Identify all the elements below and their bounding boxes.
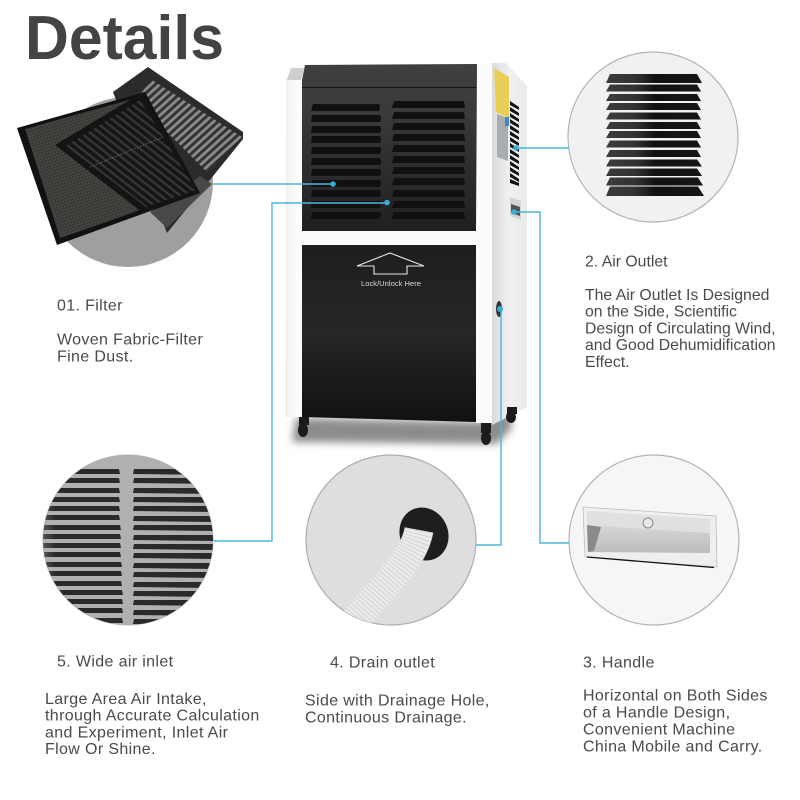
text: filter: Woven Fabric-Filter <box>57 332 203 348</box>
text: wide air inlet: and Experiment, Inlet Air <box>45 724 229 742</box>
title: Details <box>25 4 224 73</box>
right intake vents <box>392 101 465 219</box>
warning label <box>494 68 509 118</box>
text: air outlet <box>585 254 776 371</box>
text: filter: 01. Filter <box>57 298 123 314</box>
lock text: Lock/Unlock Here <box>361 279 421 288</box>
casters <box>298 407 517 445</box>
floor shadow <box>292 412 512 444</box>
text: drain outlet: Continuous Drainage. <box>305 710 467 726</box>
connector: filter <box>213 181 336 187</box>
side handle <box>510 197 521 220</box>
panel: air outlet image <box>568 52 738 222</box>
rating label <box>497 114 508 161</box>
text: wide air inlet <box>45 654 260 758</box>
connector: handle <box>511 209 569 543</box>
text: filter <box>57 298 203 366</box>
panel: dehumidifier unit <box>285 63 527 445</box>
text: wide air inlet: through Accurate Calculation <box>45 708 260 725</box>
text: handle: Horizontal on Both Sides <box>583 688 768 704</box>
text: air outlet: Design of Circulating Wind, <box>585 320 776 338</box>
panel: drain outlet image <box>306 455 476 632</box>
text: drain outlet: Side with Drainage Hole, <box>305 692 490 710</box>
side panel <box>492 63 527 425</box>
lower black door <box>302 245 476 422</box>
connector: drain outlet <box>476 306 503 545</box>
text: drain outlet: 4. Drain outlet <box>330 654 435 672</box>
drain port <box>496 301 502 317</box>
panel: filter image <box>17 67 243 267</box>
connector: air outlet <box>513 145 569 151</box>
text: drain outlet <box>305 654 490 726</box>
text: wide air inlet: Large Area Air Intake, <box>45 691 207 708</box>
front frame <box>285 63 492 423</box>
text: air outlet: and Good Dehumidification <box>585 337 776 354</box>
text: handle: 3. Handle <box>583 654 655 672</box>
text: wide air inlet: 5. Wide air inlet <box>57 654 174 671</box>
side vents <box>510 101 519 186</box>
left intake vents <box>311 104 381 219</box>
panel: handle image <box>569 455 739 625</box>
text: handle: China Mobile and Carry. <box>583 738 763 756</box>
connector: wide air inlet <box>214 200 390 541</box>
text: air outlet: 2. Air Outlet <box>585 254 668 271</box>
text: handle: of a Handle Design, <box>583 704 730 722</box>
text: air outlet: Effect. <box>585 354 630 371</box>
upper black panel <box>302 64 477 231</box>
text: air outlet: The Air Outlet Is Designed <box>585 287 769 304</box>
text: handle: Convenient Machine <box>583 722 735 738</box>
panel: wide air inlet image <box>43 455 214 625</box>
text: air outlet: on the Side, Scientific <box>585 304 737 321</box>
text: filter: Fine Dust. <box>57 348 134 366</box>
text: wide air inlet: Flow Or Shine. <box>45 741 156 758</box>
text: handle <box>583 654 768 756</box>
lock arrow <box>357 253 424 274</box>
